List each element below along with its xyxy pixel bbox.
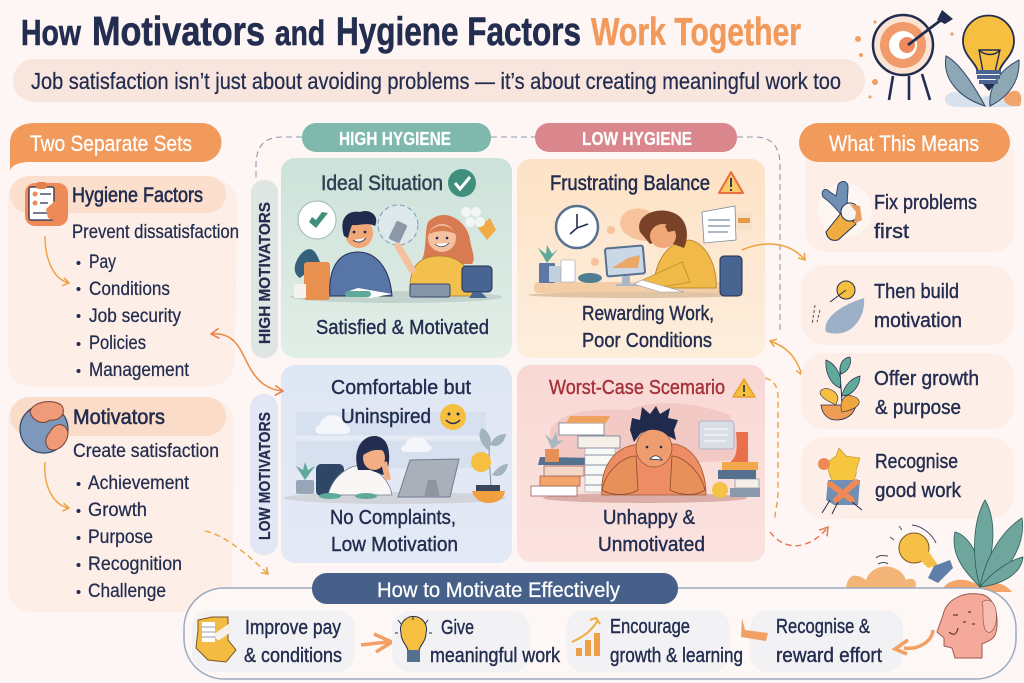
list: hygiene factors: Job security [89, 306, 181, 327]
card: then build motivation: motivation [874, 310, 962, 332]
heading: what this means: What This Means [829, 131, 979, 156]
icon: bulb [395, 616, 432, 662]
heading: two separate sets [10, 123, 222, 172]
card: fix problems first: Fix problems [874, 192, 977, 214]
list: hygiene factors: Management [89, 360, 190, 381]
icon: target with arrow [855, 10, 954, 100]
step: give meaningful work [392, 611, 561, 672]
arrow: hygiene to low hygiene row [211, 334, 283, 391]
panel: what this means [799, 123, 1014, 519]
row label: high motivators: HIGH MOTIVATORS [257, 202, 274, 344]
arrow: worst case to recognise [770, 527, 828, 546]
icon: growth chart [572, 618, 600, 656]
title: How [21, 12, 82, 53]
step: encourage growth and learning [566, 610, 743, 672]
card: then build motivation: Then build [874, 281, 959, 303]
step: encourage growth and learning: Encourage [610, 616, 690, 638]
arrow: poor conditions to offer growth [770, 341, 802, 375]
icon: light bulb with leaves [945, 16, 1021, 107]
icon: plant in hand [820, 357, 860, 420]
card: hygiene factors [8, 176, 239, 387]
card: recognise good work [801, 437, 1014, 519]
arrow: step three to four [741, 618, 768, 641]
quadrant: frustrating balance: Poor Conditions [582, 330, 712, 352]
icon: hand with money [196, 617, 236, 662]
icon: warning triangle [719, 172, 743, 193]
card: fix problems first: first [874, 221, 909, 243]
icon: brain [20, 402, 68, 453]
quadrant: ideal situation [281, 158, 512, 358]
list: motivators: Achievement [88, 473, 190, 494]
heading: two separate sets: Two Separate Sets [30, 131, 192, 156]
row label: low motivators [250, 394, 278, 555]
list: hygiene factors: Conditions [89, 279, 170, 300]
icon: star badge figure [818, 448, 862, 514]
heading: what this means [799, 123, 1010, 162]
quadrant: ideal situation: Satisfied & Motivated [316, 317, 489, 339]
arrow: worst case dashed down [765, 378, 778, 518]
panel: two separate sets [8, 123, 239, 612]
icon: clipboard [25, 182, 68, 226]
list: hygiene factors: Pay [89, 252, 116, 273]
arrow: step one to two [361, 634, 392, 652]
icon: smiley [440, 404, 466, 430]
card: fix problems first [805, 150, 1014, 252]
step: improve pay and conditions: Improve pay [245, 617, 341, 639]
quadrant: comfortable but uninspired [281, 365, 512, 563]
arrow: hygiene list [45, 236, 69, 283]
step: improve pay and conditions [192, 610, 355, 672]
arrow: motivators list [45, 462, 69, 508]
subtitle banner: Job satisfaction isn’t just about avoiding problems — it’s about creating meaningful work too [31, 68, 841, 94]
list: motivators [76, 473, 190, 602]
step: improve pay and conditions: & conditions [244, 645, 342, 667]
title: Work Together [591, 11, 801, 54]
list: motivators: Purpose [88, 527, 153, 548]
quadrant: comfortable but uninspired: Low Motivation [331, 534, 458, 556]
step: encourage growth and learning: growth & learning [610, 645, 743, 667]
quadrant: frustrating balance [517, 159, 765, 358]
quadrant: frustrating balance: Rewarding Work, [582, 303, 714, 325]
arrow: dashed motivators to bottom [205, 531, 268, 574]
icon: hand with coin [812, 281, 864, 334]
card: offer growth and purpose: & purpose [875, 397, 961, 419]
list: hygiene factors [76, 252, 190, 381]
quadrant: worst-case scenario: Unhappy & [603, 507, 696, 529]
icon: green check [448, 169, 476, 197]
illustration: stressed worker at desk [528, 206, 752, 298]
quadrant: worst-case scenario: Worst-Case Scemario [549, 377, 725, 399]
step: recognise and reward effort: Recognise & [776, 616, 871, 638]
column header: low hygiene: LOW HYGIENE [582, 129, 692, 149]
row label: low motivators: LOW MOTIVATORS [257, 412, 274, 540]
title: Hygiene Factors [336, 10, 581, 54]
arrow: frustrating balance to fix problems [742, 244, 805, 260]
heading: how to motivate effectively [312, 573, 678, 604]
title: Motivators [92, 8, 265, 54]
card: offer growth and purpose [801, 353, 1014, 429]
quadrant: worst-case scenario: Unmotivated [598, 534, 705, 556]
icon: warning triangle [733, 379, 755, 397]
column header: high hygiene: HIGH HYGIENE [339, 129, 451, 149]
card: motivators: Motivators [73, 406, 165, 429]
step: give meaningful work: Give [441, 617, 474, 639]
quadrant: comfortable but uninspired: Comfortable but [331, 377, 471, 399]
arrow: loop back [895, 630, 933, 654]
list: motivators: Growth [88, 500, 147, 521]
list: motivators: Challenge [88, 581, 166, 602]
dashed matrix outline [256, 137, 780, 332]
illustration: two happy colleagues [290, 201, 502, 303]
quadrant: ideal situation: Ideal Situation [321, 172, 443, 195]
card: then build motivation [801, 265, 1014, 345]
row label: high motivators [251, 180, 278, 358]
column header: low hygiene [535, 123, 737, 152]
decoration: bulb and leaves [846, 500, 1023, 592]
title: and [275, 14, 325, 53]
card: recognise good work: Recognise [875, 451, 958, 473]
list: hygiene factors: Policies [89, 333, 146, 354]
list: motivators: Recognition [88, 554, 182, 575]
illustration: bored office worker [284, 412, 508, 504]
icon: wrench [818, 181, 872, 240]
step: recognise and reward effort [750, 610, 903, 672]
heading: how to motivate effectively: How to Motivate Effectively [377, 579, 620, 602]
card: recognise good work: good work [875, 480, 962, 502]
title [21, 8, 801, 54]
step: give meaningful work: meaningful work [430, 645, 561, 667]
card: motivators: Create satisfaction [73, 441, 219, 462]
quadrant: comfortable but uninspired: Uninspired [341, 406, 431, 428]
icon: head in profile [937, 594, 997, 658]
illustration: overwhelmed worker with books [531, 403, 760, 503]
step: recognise and reward effort: reward effort [776, 645, 882, 667]
quadrant: frustrating balance: Frustrating Balance [550, 172, 710, 195]
quadrant: comfortable but uninspired: No Complaints, [330, 507, 456, 529]
column header: high hygiene [302, 123, 491, 152]
quadrant: worst-case scenario [517, 365, 765, 562]
card: offer growth and purpose: Offer growth [874, 368, 979, 390]
subtitle banner [13, 59, 865, 102]
card: motivators [8, 397, 234, 612]
card: hygiene factors: Hygiene Factors [72, 184, 203, 207]
panel: how to motivate effectively [184, 573, 1016, 679]
card: hygiene factors: Prevent dissatisfaction [72, 222, 239, 243]
